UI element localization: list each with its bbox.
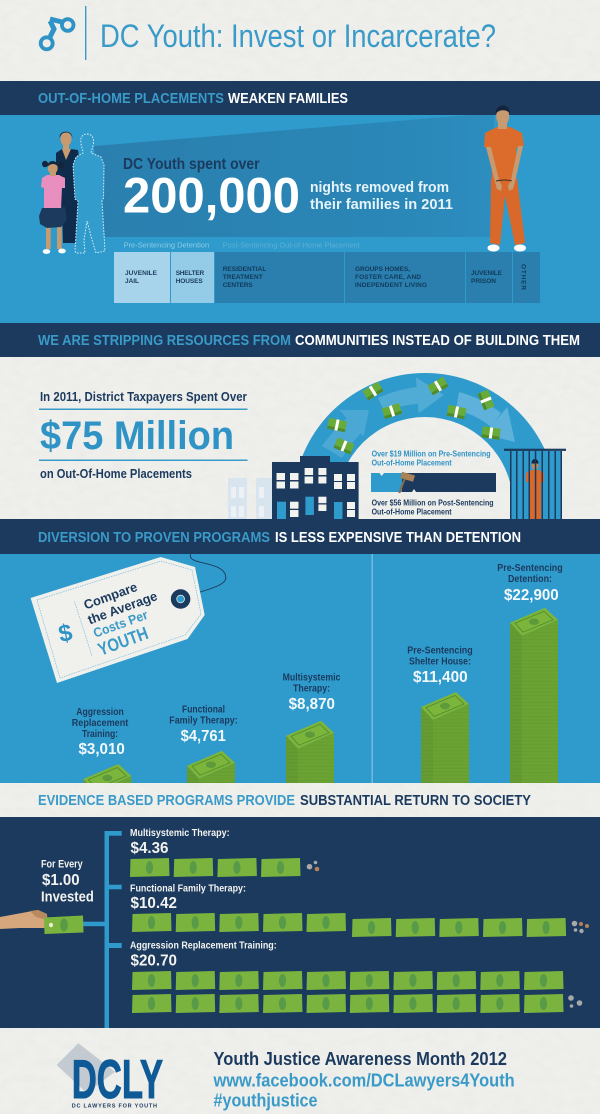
text: DC Youth spent over: DC Youth spent over xyxy=(123,156,260,173)
text: nights removed: nights removed from xyxy=(310,179,449,196)
price tag: compare average costs: the Average xyxy=(86,588,159,627)
segment: residential treatment centers: RESIDENTIAL xyxy=(223,266,266,273)
segment: other: OTHER xyxy=(520,264,526,290)
segment: juvenile prison xyxy=(466,252,512,303)
logo: DCLY: DCLY xyxy=(72,1048,163,1110)
footer text: www.facebook.com/DCLawyers4Youth xyxy=(213,1071,515,1091)
stack: functional family therapy xyxy=(169,704,238,951)
header divider xyxy=(85,6,86,60)
illustration: community building xyxy=(272,456,359,519)
stack: functional family therapy: Family Therapy: xyxy=(169,715,238,727)
section band: out-of-home placements xyxy=(0,81,600,115)
segment: group homes: INDEPENDENT LIVING xyxy=(355,282,427,289)
stack: functional family therapy: $4,761 xyxy=(181,728,226,745)
icon: handcuffs xyxy=(41,19,74,49)
segment: juvenile prison: JUVENILE xyxy=(471,270,503,277)
stack: pre-sentencing shelter house xyxy=(407,645,473,892)
illustration: girl xyxy=(39,161,67,254)
stack: multisystemic therapy: Therapy: xyxy=(293,683,330,695)
ghost buildings xyxy=(228,478,274,519)
jailed figure xyxy=(526,459,544,519)
text: for every $1.00 invested: Invested xyxy=(41,889,94,906)
text: over $56 million: Over $56 Million on Post-Sentencing xyxy=(372,498,494,508)
label: post-sentencing: Post-Sentencing Out-of-Home Placement xyxy=(223,240,361,250)
stack: pre-sentencing shelter house: Shelter House: xyxy=(409,656,471,668)
segment: residential treatment centers: CENTERS xyxy=(223,282,253,289)
section band: out-of-home placements: WEAKEN FAMILIES xyxy=(228,91,348,107)
segment: juvenile jail xyxy=(114,252,170,303)
segment: shelter houses xyxy=(171,252,214,303)
illustration: money arch xyxy=(293,373,557,505)
section band: diversion to proven programs: IS LESS EXPENSIVE THAN DETENTION xyxy=(275,530,521,546)
logo: DCLY: DC LAWYERS FOR YOUTH xyxy=(72,1104,157,1110)
illustration: missing child dashed silhouette xyxy=(73,134,105,253)
text: for every $1.00 invested xyxy=(41,859,94,906)
stack: pre-sentencing detention: Pre-Sentencing xyxy=(497,562,563,574)
program: aggression replacement training xyxy=(130,940,582,1013)
stack: pre-sentencing shelter house: Pre-Sentencing xyxy=(407,645,473,657)
logo: DCLY xyxy=(57,1043,163,1110)
icon: hand holding bill xyxy=(0,910,84,934)
segment: group homes xyxy=(345,252,465,303)
split bar: pre vs post sentencing spending xyxy=(371,472,496,493)
stack: aggression replacement training: Training: xyxy=(82,728,118,740)
wedge of nights removed xyxy=(94,113,494,237)
section band: out-of-home placements: OUT-OF-HOME PLACEMENTS xyxy=(38,91,224,107)
arrow 1 xyxy=(322,410,369,458)
segment: group homes: GROUPS HOMES, xyxy=(355,266,410,273)
heading: evidence based programs xyxy=(38,793,531,809)
stack: pre-sentencing detention xyxy=(497,562,563,808)
text: nights removed xyxy=(310,179,453,213)
big number: 200,000: 200,000 xyxy=(123,168,300,224)
stack: pre-sentencing detention: Detention: xyxy=(508,573,552,585)
segment: other xyxy=(513,252,540,303)
section band: stripping resources: WE ARE STRIPPING RESOURCES FROM xyxy=(38,333,291,349)
stack: aggression replacement training: Aggression xyxy=(76,706,124,718)
callout: in 2011 taxpayers spent: $75 Million xyxy=(40,414,234,458)
text: nights removed: their families in 2011 xyxy=(310,196,453,213)
program: functional family therapy: $10.42 xyxy=(130,895,177,912)
segment: group homes: FOSTER CARE, AND xyxy=(355,274,421,281)
segment: juvenile jail: JUVENILE xyxy=(125,270,158,277)
label: pre-sentencing: Pre-Sentencing Detention xyxy=(124,240,209,250)
callout: in 2011 taxpayers spent: on Out-Of-Home Placements xyxy=(40,467,192,481)
stack: aggression replacement training: $3,010 xyxy=(78,741,125,758)
segment: residential treatment centers xyxy=(215,252,344,303)
title: DC Youth: Invest or Incarcerate? xyxy=(100,18,496,54)
price tag: compare average costs xyxy=(31,554,226,683)
illustration: mother xyxy=(56,132,80,243)
price tag: compare average costs: Costs Per xyxy=(91,607,150,641)
section band: stripping resources xyxy=(0,323,600,357)
stack: pre-sentencing shelter house: $11,400 xyxy=(413,669,468,686)
footer text: Youth Justice Awareness Month 2012 xyxy=(214,1049,507,1069)
heading: evidence based programs: EVIDENCE BASED PROGRAMS PROVIDE xyxy=(38,793,295,809)
stack: functional family therapy: Functional xyxy=(182,704,225,716)
callout: in 2011 taxpayers spent: In 2011, District Taxpayers Spent Over xyxy=(40,390,247,404)
segment: residential treatment centers: TREATMENT xyxy=(223,274,263,281)
program: functional family therapy: Functional Family Therapy: xyxy=(130,882,246,894)
illustration: incarcerated youth xyxy=(484,105,526,252)
arrow 2 xyxy=(378,377,444,413)
text: over $56 million xyxy=(372,498,494,516)
section band: diversion to proven programs xyxy=(0,519,600,554)
footer text: #youthjustice xyxy=(214,1091,318,1111)
section band: stripping resources: COMMUNITIES INSTEAD OF BUILDING THEM xyxy=(295,333,580,349)
panel: return on investment xyxy=(0,817,600,1028)
section band: diversion to proven programs: DIVERSION TO PROVEN PROGRAMS xyxy=(38,530,270,546)
icon: gavel xyxy=(399,472,415,493)
price tag: compare average costs: Compare xyxy=(82,579,139,612)
stack: multisystemic therapy: $8,870 xyxy=(289,696,335,713)
illustration: jail cell xyxy=(504,449,566,519)
program: functional family therapy xyxy=(130,882,589,937)
panel: out-of-home placements xyxy=(0,113,600,323)
footer text xyxy=(213,1049,515,1111)
text: over $19 million xyxy=(372,449,491,468)
text: for every $1.00 invested: $1.00 xyxy=(42,872,80,889)
text: for every $1.00 invested: For Every xyxy=(41,859,83,871)
panel: cost comparison xyxy=(0,554,600,964)
text: over $19 million: Out-of-Home Placement xyxy=(372,458,452,468)
price tag: compare average costs: YOUTH xyxy=(95,623,151,660)
text: over $56 million: Out-of-Home Placement xyxy=(372,506,452,516)
segment: juvenile jail: JAIL xyxy=(125,278,139,285)
segment: shelter houses: HOUSES xyxy=(176,278,203,285)
program: aggression replacement training: $20.70 xyxy=(130,953,177,970)
program: multisystemic therapy xyxy=(130,827,319,877)
callout: in 2011 taxpayers spent xyxy=(39,390,248,481)
program: aggression replacement training: Aggression Replacement Training: xyxy=(130,940,277,952)
segment: shelter houses: SHELTER xyxy=(176,270,204,277)
stack: pre-sentencing detention: $22,900 xyxy=(504,587,559,604)
program: multisystemic therapy: $4.36 xyxy=(130,840,169,857)
text: over $19 million: Over $19 Million on Pre-Sentencing xyxy=(372,449,491,459)
stack: aggression replacement training xyxy=(72,706,131,964)
program: multisystemic therapy: Multisystemic Therapy: xyxy=(130,827,230,839)
price tag: compare average costs: $ xyxy=(56,619,75,648)
stack: aggression replacement training: Replacement xyxy=(72,717,129,729)
stack: multisystemic therapy xyxy=(283,672,341,921)
arrow 3 xyxy=(456,392,515,442)
segment: juvenile prison: PRISON xyxy=(471,278,496,285)
money bundles xyxy=(327,377,501,454)
stack: multisystemic therapy: Multisystemic xyxy=(283,672,341,684)
branching tree lines xyxy=(83,831,122,1028)
heading: evidence based programs: SUBSTANTIAL RETURN TO SOCIETY xyxy=(300,793,531,809)
